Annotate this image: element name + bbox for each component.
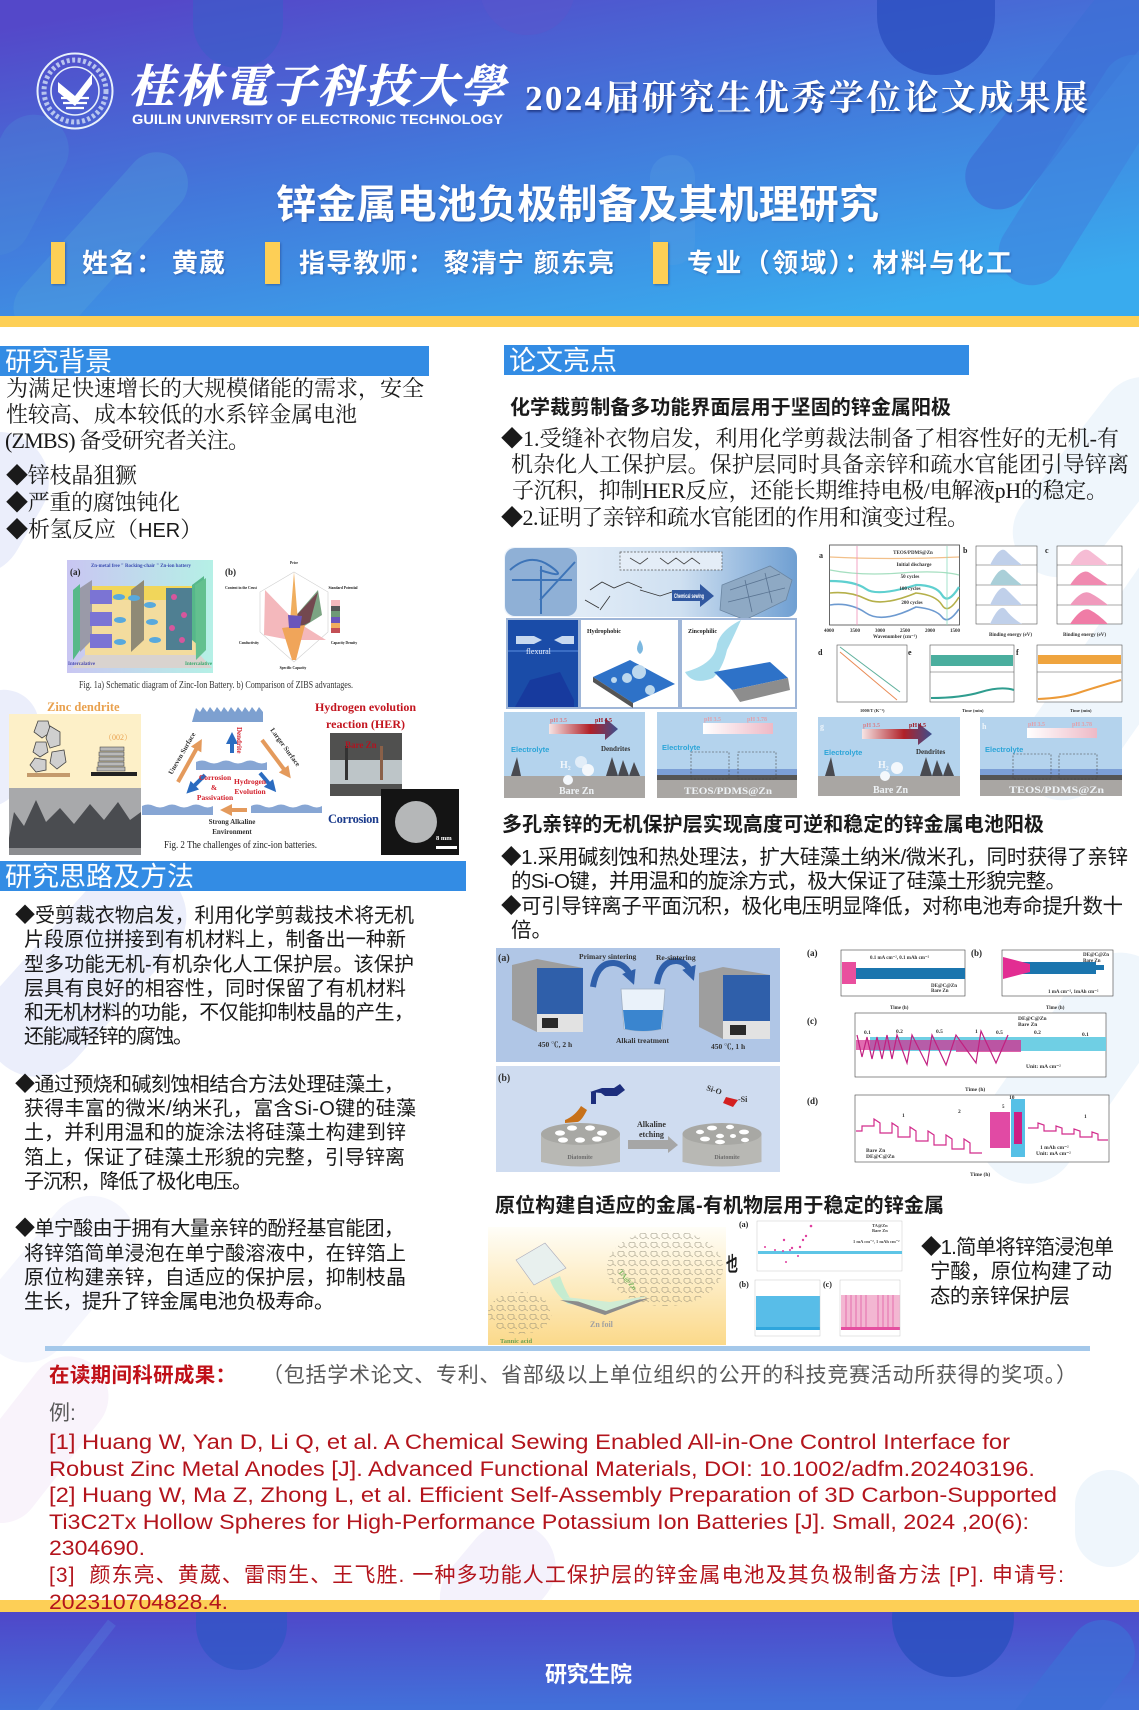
chart b: TA@Zn voltage — [739, 1280, 820, 1336]
figure 2: challenge cycle diagram: Fig. 2 The challenges of zinc-ion batteries. — [164, 840, 317, 851]
chart c: rate performance: DE@C@Zn — [1018, 1016, 1047, 1022]
figure 2: challenge cycle diagram: Environment — [212, 828, 252, 836]
chart d: areal capacity test: 1 — [1084, 1114, 1087, 1120]
chart b: XPS O 1s — [963, 546, 1037, 638]
figure 1a: battery schematic — [67, 560, 213, 673]
figure 2: hydrogen evolution and corrosion photos — [315, 700, 459, 855]
chart a: FTIR spectra: 2500 — [900, 629, 910, 634]
figure g: bare Zn panel: pH 3.5 — [863, 723, 880, 729]
footer banner: 研究生院 — [545, 1662, 632, 1687]
text: highlight 2 description: 的Si-O键，并用温和的旋涂方式，极大保证了硅藻土形貌完整。 — [511, 870, 1066, 893]
chart a: cycling at 0.1 mA: Time (h) — [890, 1006, 909, 1011]
figure: bare Zn electrolyte panel: Dendrites — [601, 745, 630, 753]
figure b: alkaline etching: Diatomite — [714, 1155, 740, 1161]
text: method 2: ◆通过预烧和碱刻蚀相结合方法处理硅藻土， — [15, 1073, 404, 1096]
figure: TEOS/PDMS@Zn panel: pH 3.5 — [704, 717, 721, 723]
chart d: Arrhenius plot: 1000/T (K⁻¹) — [860, 708, 885, 713]
chart b: cycling at 1 mA: Time (h) — [1046, 1006, 1065, 1011]
text: challenge bullets — [6, 463, 202, 542]
chart a: cycling at 0.1 mA: Bare Zn — [931, 989, 949, 994]
figure b: alkaline etching: (b) — [498, 1073, 510, 1084]
text: method 1: 还能减轻锌的腐蚀。 — [24, 1025, 193, 1048]
figure g: bare Zn panel: Bare Zn — [873, 785, 909, 796]
heading: highlight 2: 多孔亲锌的无机保护层实现高度可逆和稳定的锌金属电池阳极 — [502, 812, 1044, 836]
text: highlight 1 description: 机杂化人工保护层。保护层同时具备亲锌和疏水官能团引导锌离 — [511, 452, 1129, 477]
chart a: FTIR spectra: Initial discharge — [897, 563, 932, 568]
figure h: TEOS/PDMS@Zn panel: h — [982, 722, 987, 731]
figure: TEOS/PDMS@Zn panel: pH 3.78 — [747, 717, 767, 723]
figure: TEOS/PDMS@Zn panel — [657, 712, 797, 798]
student and advisor info row: 专业（领域）：材料与化工 — [687, 248, 1012, 278]
text: publication list: [3] 颜东亮、黄葳、雷雨生、王飞胜. 一种多功能人工保护层的锌金属电池及其负极制备方法 [P]. 申请号: — [49, 1564, 1064, 1587]
figure g: bare Zn panel: g — [820, 722, 824, 731]
section bar: research background — [0, 346, 429, 377]
section bar: thesis highlights — [504, 345, 969, 376]
chart a: FTIR spectra: 3500 — [850, 629, 860, 634]
figure: chemical sewing schematic — [504, 547, 797, 620]
chart d: areal capacity test: 5 — [1002, 1105, 1005, 1110]
section bar: research approach and methods: 研究思路及方法 — [5, 862, 194, 892]
text: challenge bullets: ◆严重的腐蚀钝化 — [6, 490, 180, 515]
figure 1b: radar chart: Price — [290, 561, 298, 565]
chart d: areal capacity test: Unit: mA cm⁻² — [1036, 1151, 1071, 1157]
chart a: FTIR spectra: 2000 — [925, 629, 936, 634]
text: method 3: 生长，提升了锌金属电池负极寿命。 — [24, 1290, 334, 1313]
text: method 2: 子沉积，降低了极化电压。 — [24, 1170, 252, 1193]
chart d: areal capacity test: DE@C@Zn — [866, 1154, 895, 1160]
figure 2: zinc dendrite panel: Zinc dendrite — [47, 700, 120, 714]
figure 1 caption: Fig. 1a) Schematic diagram of Zinc-Ion Battery. b) Comparison of ZIBS advantages. — [79, 680, 353, 691]
chart a: FTIR spectra — [819, 545, 960, 640]
heading: highlight 3: 原位构建自适应的金属-有机物层用于稳定的锌金属 — [495, 1193, 944, 1217]
figure: bare Zn electrolyte panel: H₂ — [560, 760, 571, 771]
figure: chemical sewing schematic: Chemical sewing — [674, 594, 704, 600]
chart a: cycling at 0.1 mA: (a) — [807, 948, 818, 958]
chart d: areal capacity test: 2 — [958, 1109, 961, 1115]
figure b: alkaline etching — [496, 1066, 780, 1172]
text: method 1: 和无机材料的功能，不仅能抑制枝晶的产生， — [24, 1001, 414, 1024]
top yellow footer band — [0, 1600, 1139, 1612]
chart c: XPS Si 2p — [1045, 546, 1122, 638]
text: research achievements heading: （包括学术论文、专利、省部级以上单位组织的公开的科技竞赛活动所获得的奖项。） — [262, 1364, 1077, 1387]
text: background paragraph — [5, 376, 424, 453]
chart a: FTIR spectra: Wavenumber (cm⁻¹) — [873, 634, 917, 640]
figure b: alkaline etching: Si-O — [705, 1083, 723, 1097]
header banner — [0, 0, 1139, 316]
chart a: cycling at 0.1 mA: DE@C@Zn — [931, 984, 957, 989]
figure: tannic acid coating: TA@Zn — [616, 1268, 638, 1292]
figure 1b: radar chart — [225, 561, 358, 670]
chart a: FTIR spectra: 4000 — [824, 629, 834, 634]
text: research achievements heading: 例: — [49, 1402, 76, 1425]
figure a: sintering process: 450 ℃, 1 h — [711, 1042, 746, 1051]
figure: tannic acid coating: Tannic acid — [500, 1338, 532, 1345]
text: method 1: 片段原位拼接到有机材料上，制备出一种新 — [24, 928, 406, 951]
text: method 3: ◆单宁酸由于拥有大量亲锌的酚羟基官能团， — [15, 1217, 404, 1240]
figure: hydrophobic and zincophilic panels — [506, 618, 797, 709]
student and advisor info row — [51, 242, 1012, 284]
figure 2: hydrogen evolution and corrosion photos: Corrosion — [328, 812, 379, 826]
text: method 2: 土，并利用温和的旋涂法将硅藻土构建到锌 — [24, 1121, 406, 1144]
figure 2: challenge cycle diagram: Uneven Surface — [167, 731, 197, 776]
figure 2: challenge cycle diagram — [142, 707, 322, 851]
figure 2: challenge cycle diagram: Evolution — [234, 787, 266, 796]
chart a: FTIR spectra: 3000 — [875, 629, 886, 634]
figure 2: challenge cycle diagram: Strong Alkaline — [209, 818, 255, 826]
chart b: cycling at 1 mA: 1 mA cm⁻², 1mAh cm⁻² — [1048, 989, 1099, 995]
chart f: bare Zn voltage and pH: f — [1016, 648, 1019, 657]
chart d: areal capacity test: 1 — [902, 1113, 905, 1119]
figure 2: zinc dendrite panel: （002） — [104, 733, 132, 742]
chart c: rate performance: 0.1 — [1082, 1032, 1089, 1038]
figure h: TEOS/PDMS@Zn panel: TEOS/PDMS@Zn — [1009, 786, 1105, 796]
student and advisor info row: 指导教师： 黎清宁 颜东亮 — [299, 248, 614, 278]
figure 2: challenge cycle diagram: Dendrite — [235, 727, 243, 753]
figure h: TEOS/PDMS@Zn panel: pH 3.78 — [1072, 722, 1092, 728]
figure h: TEOS/PDMS@Zn panel: Electrolyte — [985, 745, 1023, 754]
text: research achievements heading: 在读期间科研成果： — [49, 1363, 236, 1387]
figure 2: challenge cycle diagram: Hydrogen — [234, 777, 267, 786]
figure g: bare Zn panel: H₂ — [878, 760, 889, 771]
figure a: sintering process: 450 ℃, 2 h — [538, 1040, 573, 1049]
figure: bare Zn electrolyte panel: Bare Zn — [559, 786, 595, 797]
exhibition heading: 2024届研究生优秀学位论文成果展 — [525, 79, 1088, 118]
figure: bare Zn electrolyte panel: pH 3.5 — [550, 718, 567, 724]
text: publication list: 2304690. — [49, 1537, 145, 1560]
figure 1b: radar chart: Specific Capacity — [280, 666, 307, 670]
figure 1a: battery schematic: Zn-metal free " Rocking-chair " Zn-ion battery — [91, 564, 191, 569]
text: highlight 1 description: ◆2.证明了亲锌和疏水官能团的作用和演变过程。 — [501, 505, 969, 530]
chart d: areal capacity test: 1 mAh cm⁻² — [1040, 1145, 1069, 1151]
text: method 2: 箔上，保证了硅藻土形貌的完整，引导锌离 — [24, 1146, 405, 1169]
figure 1b: radar chart: (b) — [225, 567, 236, 577]
text: highlight 3 description: ◆1.简单将锌箔浸泡单 — [921, 1236, 1114, 1259]
chart f: bare Zn voltage and pH — [1016, 645, 1122, 713]
text: highlight 1 description: 子沉积，抑制HER反应，还能长期维持电极/电解液pH的稳定。 — [512, 478, 1108, 504]
chart a: cycling at 0.1 mA: 0.1 mA cm⁻², 0.1 mAh cm⁻² — [870, 955, 930, 961]
figure h: TEOS/PDMS@Zn panel — [980, 717, 1122, 796]
text: challenge bullets: ◆锌枝晶狙獗 — [6, 463, 137, 488]
text: publication list: Ti3C2Tx Hollow Spheres for High-Performance Potassium Ion Batteries [J]. Small, 2024 ,20(6): — [49, 1511, 1029, 1534]
chart c: rate performance: 0.5 — [996, 1030, 1003, 1036]
chart e: voltage and pH — [908, 645, 1014, 713]
figure g: bare Zn panel: Dendrites — [916, 748, 945, 756]
chart a: coulombic efficiency: (a) — [739, 1220, 749, 1229]
chart e: voltage and pH: Time (min) — [962, 708, 984, 713]
text: publication list: Robust Zinc Metal Anodes [J]. Advanced Functional Materials, DOI: 10.1002/adfm.202403196. — [49, 1458, 1035, 1481]
clipped title fragment beside figure: 也 — [726, 1253, 738, 1276]
figure 2: challenge cycle diagram: Larger Surface — [268, 726, 302, 768]
text: method 1: 型多功能无机-有机杂化人工保护层。该保护 — [24, 953, 414, 976]
chart a: coulombic efficiency: TA@Zn — [872, 1223, 888, 1228]
figure b: alkaline etching: etching — [639, 1130, 664, 1139]
figure g: bare Zn panel: pH 4.5 — [909, 723, 926, 729]
chart b: cycling at 1 mA — [971, 948, 1113, 1011]
figure: TEOS/PDMS@Zn panel: TEOS/PDMS@Zn — [684, 787, 773, 797]
text: highlight 2 description: ◆1.采用碱刻蚀和热处理法，扩大硅藻土纳米/微米孔，同时获得了亲锌 — [501, 846, 1128, 869]
figure: tannic acid coating: Zn foil — [590, 1320, 614, 1329]
figure 2: challenge cycle diagram: & — [211, 783, 217, 792]
figure 2: hydrogen evolution and corrosion photos: reaction (HER) — [326, 717, 405, 731]
chart c: rate performance — [807, 1013, 1106, 1093]
chart d: areal capacity test: Bare Zn — [866, 1148, 885, 1154]
figure 1a: battery schematic: Intercalative — [68, 662, 96, 667]
chart a: FTIR spectra: 1500 — [950, 629, 960, 634]
figure: hydrophobic and zincophilic panels: Hydrophobic — [587, 629, 621, 635]
university name: 桂林電子科技大學 — [129, 62, 509, 112]
figure g: bare Zn panel: Electrolyte — [824, 748, 862, 757]
figure: bare Zn electrolyte panel: pH 4.5 — [595, 718, 612, 724]
chart d: areal capacity test: Time (h) — [970, 1171, 990, 1178]
student and advisor info row: 姓名： 黄葳 — [82, 248, 225, 278]
text: method 3 — [15, 1217, 406, 1313]
figure 2: hydrogen evolution and corrosion photos: Hydrogen evolution — [315, 700, 416, 714]
figure: TEOS/PDMS@Zn panel: Electrolyte — [662, 743, 700, 752]
chart a: coulombic efficiency: Bare Zn — [872, 1228, 888, 1233]
chart d: areal capacity test: (d) — [807, 1096, 818, 1106]
chart c: rate performance: 0.5 — [936, 1029, 943, 1035]
chart c: rate performance: (c) — [807, 1016, 817, 1026]
figure 2: zinc dendrite panel — [9, 700, 141, 855]
text: method 1 — [15, 904, 414, 1048]
chart a: FTIR spectra: a — [819, 551, 823, 560]
section bar: thesis highlights: 论文亮点 — [509, 346, 617, 376]
figure 2: hydrogen evolution and corrosion photos: 8 mm — [436, 835, 452, 842]
figure: hydrophobic and zincophilic panels: Zincophilic — [688, 629, 717, 635]
section bar: research approach and methods — [0, 861, 466, 892]
text: method 1: ◆受剪裁衣物启发，利用化学剪裁技术将无机 — [15, 904, 414, 927]
figure a: sintering process: (a) — [498, 953, 510, 964]
text: highlight 3 description — [921, 1236, 1114, 1308]
text: publication list: [2] Huang W, Ma Z, Zhong L, et al. Efficient Self-Assembly Preparation of 3D Carbon-Supported — [49, 1484, 1057, 1507]
figure h: TEOS/PDMS@Zn panel: pH 3.5 — [1028, 722, 1045, 728]
text: background paragraph: (ZMBS) 备受研究者关注。 — [5, 428, 250, 453]
chart b: XPS O 1s: Binding energy (eV) — [989, 633, 1032, 638]
chart a: FTIR spectra: 200 cycles — [901, 601, 923, 606]
text: highlight 3 description: 宁酸，原位构建了动 — [930, 1260, 1112, 1283]
chart a: FTIR spectra: 100 cycles — [899, 587, 921, 592]
poster title: 锌金属电池负极制备及其机理研究 — [276, 183, 879, 227]
section bar: research background: 研究背景 — [5, 347, 112, 377]
chart d: Arrhenius plot — [818, 645, 907, 713]
chart a: FTIR spectra: 50 cycles — [901, 575, 919, 580]
figure 2: hydrogen evolution and corrosion photos: Bare Zn — [345, 740, 377, 750]
figure b: alkaline etching: Diatomite — [567, 1155, 593, 1161]
chart c: rate performance: 0.2 — [896, 1029, 903, 1035]
figure: bare Zn electrolyte panel: Electrolyte — [511, 745, 549, 754]
chart f: bare Zn voltage and pH: Time (min) — [1070, 708, 1092, 713]
chart b: XPS O 1s: b — [963, 546, 968, 555]
text: method 2: 获得丰富的微米/纳米孔，富含Si-O键的硅藻 — [24, 1097, 416, 1120]
chart c: rate performance: Unit: mA cm⁻² — [1026, 1064, 1061, 1070]
chart a: FTIR spectra: TEOS/PDMS@Zn — [893, 551, 933, 556]
figure g: bare Zn panel — [818, 717, 960, 796]
chart c: bare Zn voltage — [823, 1280, 900, 1336]
heading: highlight 1: 化学裁剪制备多功能界面层用于坚固的锌金属阳极 — [510, 395, 951, 419]
figure 2: challenge cycle diagram: Passivation — [197, 793, 234, 802]
footer banner — [0, 1612, 1139, 1710]
figure b: alkaline etching: Alkaline — [637, 1120, 666, 1129]
figure 1a: battery schematic: (a) — [70, 567, 80, 577]
figure: hydrophobic and zincophilic panels: flexural — [526, 647, 552, 656]
top yellow band — [0, 316, 1139, 327]
chart a: coulombic efficiency: 1 mA cm⁻², 1 mAh cm⁻² — [853, 1239, 900, 1244]
text: background paragraph: 性较高、成本较低的水系锌金属电池 — [6, 402, 357, 427]
figure: tannic acid coating — [488, 1227, 726, 1345]
text: highlight 3 description: 态的亲锌保护层 — [930, 1285, 1070, 1308]
chart d: areal capacity test: 10 — [1009, 1095, 1015, 1101]
chart c: bare Zn voltage: (c) — [823, 1280, 832, 1289]
text: research achievements heading — [49, 1363, 1077, 1425]
figure b: alkaline etching: -Si — [738, 1095, 748, 1104]
text: publication list — [49, 1431, 1064, 1614]
chart c: rate performance: 0.2 — [1034, 1030, 1041, 1036]
figure 1b: radar chart: Content in the Crust — [225, 586, 258, 590]
figure 1b: radar chart: Capacity Density — [331, 641, 357, 645]
chart e: voltage and pH: e — [908, 648, 912, 657]
chart b: cycling at 1 mA: (b) — [971, 948, 982, 958]
chart b: cycling at 1 mA: DE@C@Zn — [1083, 953, 1109, 958]
figure a: sintering process — [496, 948, 780, 1062]
chart c: XPS Si 2p: Binding energy (eV) — [1063, 633, 1106, 638]
figure 2: challenge cycle diagram: Corrosion — [199, 773, 232, 782]
text: method 1: 层具有良好的相容性，同时保留了有机材料 — [24, 977, 406, 1000]
text: background paragraph: 为满足快速增长的大规模储能的需求，安全 — [6, 376, 424, 402]
figure: bare Zn electrolyte panel — [504, 712, 645, 798]
chart c: rate performance: Time (h) — [965, 1086, 985, 1093]
chart b: cycling at 1 mA: Bare Zn — [1083, 959, 1101, 964]
university logo — [38, 54, 112, 128]
text: highlight 2 description: ◆可引导锌离子平面沉积，极化电压明显降低，对称电池寿命提升数十 — [501, 895, 1123, 918]
figure a: sintering process: Re-sintering — [656, 953, 696, 962]
chart d: areal capacity test — [807, 1095, 1109, 1178]
chart c: XPS Si 2p: c — [1045, 546, 1049, 555]
text: highlight 1 description — [501, 426, 1129, 530]
figure a: sintering process: Alkali treatment — [616, 1036, 669, 1045]
figure 1a: battery schematic: Intercalative — [185, 662, 213, 667]
chart b: TA@Zn voltage: (b) — [739, 1280, 749, 1289]
chart a: cycling at 0.1 mA — [807, 948, 965, 1011]
chart a: coulombic efficiency — [739, 1220, 902, 1271]
chart c: rate performance: 1 — [975, 1029, 978, 1035]
figure a: sintering process: Primary sintering — [579, 952, 637, 961]
text: highlight 2 description — [501, 846, 1128, 942]
text: challenge bullets: ◆析氢反应（HER） — [6, 517, 202, 542]
figure 1b: radar chart: Standard Potential — [328, 586, 358, 590]
text: publication list: [1] Huang W, Yan D, Li Q, et al. A Chemical Sewing Enabled All-in-One Control Interface for — [49, 1431, 1010, 1454]
chart c: rate performance: 0.1 — [864, 1030, 871, 1036]
text: highlight 1 description: ◆1.受缝补衣物启发，利用化学剪裁法制备了相容性好的无机-有 — [501, 426, 1119, 452]
chart d: Arrhenius plot: d — [818, 648, 823, 657]
page background decorations — [0, 327, 1139, 1661]
text: method 3: 将锌箔简单浸泡在单宁酸溶液中，在锌箔上 — [24, 1242, 406, 1265]
university name: GUILIN UNIVERSITY OF ELECTRONIC TECHNOLOGY — [132, 112, 503, 127]
text: highlight 2 description: 倍。 — [511, 919, 552, 942]
text: method 2 — [15, 1073, 416, 1193]
text: publication list: 202310704828.4. — [49, 1591, 228, 1614]
divider — [45, 1346, 1090, 1351]
text: method 3: 原位构建亲锌，自适应的保护层，抑制枝晶 — [24, 1266, 406, 1289]
chart c: rate performance: Bare Zn — [1018, 1022, 1037, 1028]
figure 1b: radar chart: Conductivity — [239, 641, 259, 645]
